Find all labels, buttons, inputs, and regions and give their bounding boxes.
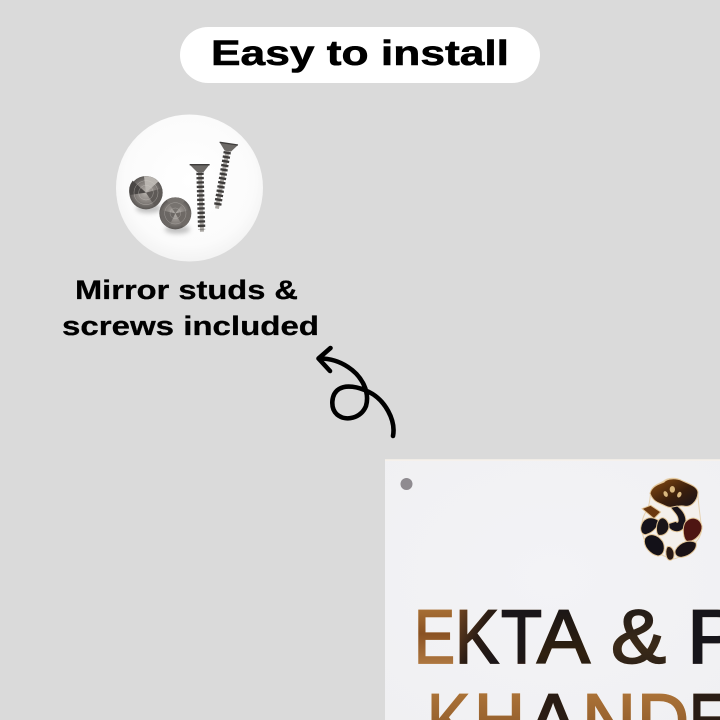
caption: mirror studs and screws included: Mirror studs &	[75, 275, 298, 305]
nameplate text: EKTA & P: E	[414, 595, 455, 680]
nameplate text: EKTA & P	[414, 595, 720, 680]
nameplate text: EKTA & P: A	[537, 595, 590, 680]
icon: ganesha emblem	[641, 478, 702, 560]
mirror stud left	[129, 176, 163, 209]
screw centre	[190, 164, 210, 232]
nameplate text: EKTA & P: K	[455, 595, 499, 680]
mirror stud right	[159, 197, 191, 229]
title: Easy to install	[211, 34, 509, 73]
arrow: curly arrow pointing to caption	[318, 348, 393, 436]
nameplate text: EKTA & P: T	[501, 595, 542, 680]
nameplate text: EKTA & P: &	[611, 595, 666, 680]
caption: mirror studs and screws included	[62, 275, 319, 341]
title pill	[180, 27, 540, 83]
caption: mirror studs and screws included: screws included	[62, 311, 319, 341]
mounting hole	[400, 478, 412, 490]
icon: mirror studs and screws	[116, 114, 263, 262]
nameplate text: KHANDE	[427, 679, 720, 720]
nameplate	[385, 460, 720, 720]
stud shadows	[136, 204, 161, 213]
screw right	[217, 142, 238, 209]
